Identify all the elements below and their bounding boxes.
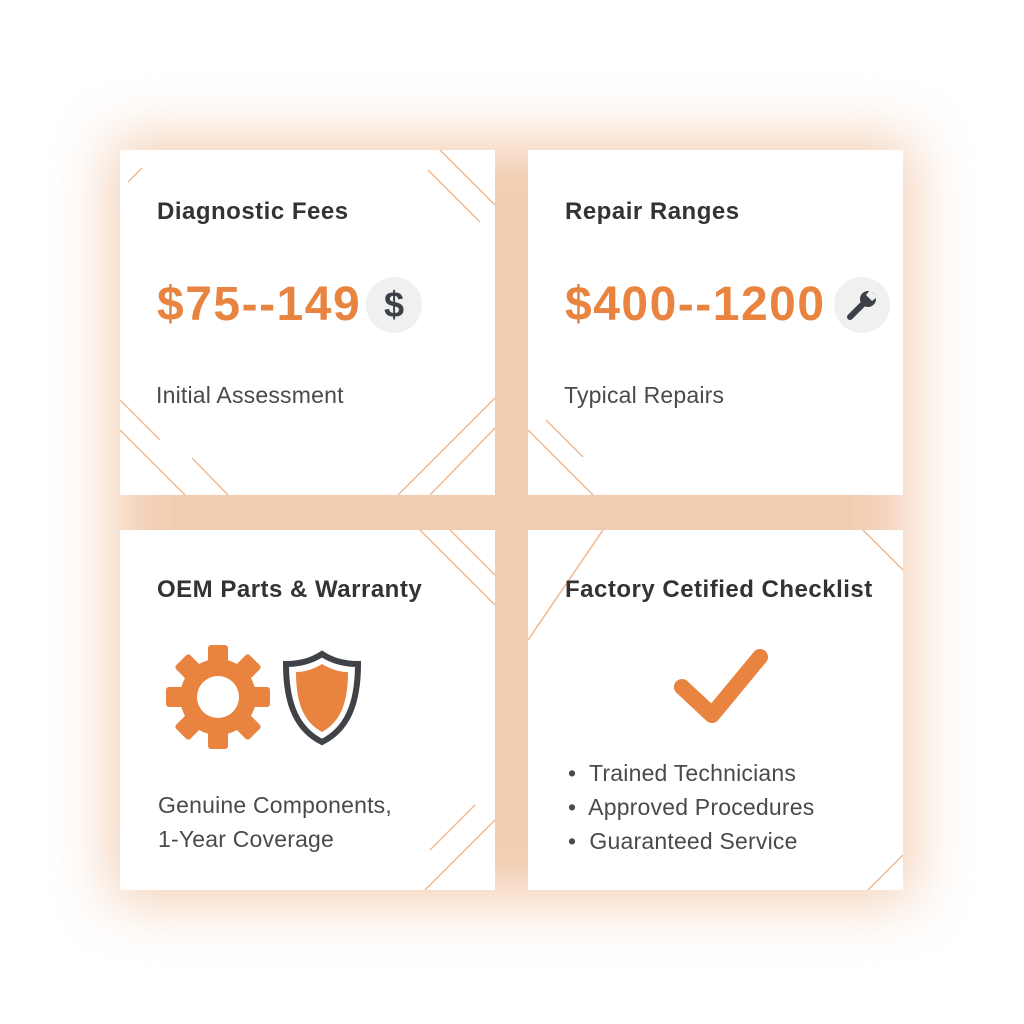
icon: gear xyxy=(166,645,270,749)
text: Initial Assessment xyxy=(156,382,344,408)
panel: repair ranges xyxy=(528,150,903,495)
price: $75--149 xyxy=(157,278,361,331)
icon: shield xyxy=(283,650,361,746)
text xyxy=(158,792,392,852)
heading: Factory Cetified Checklist xyxy=(565,576,873,603)
text: Genuine Components, xyxy=(158,792,392,818)
heading: Diagnostic Fees xyxy=(157,198,349,225)
icon: dollar xyxy=(366,277,422,333)
bullet list: • Trained Technicians xyxy=(568,760,796,786)
bullet list: • Approved Procedures xyxy=(568,794,814,820)
panel: diagnostic fees xyxy=(120,150,495,495)
icon: checkmark xyxy=(674,649,768,723)
panel: checklist xyxy=(528,530,903,890)
icon: dollar: $ xyxy=(384,284,404,325)
heading: OEM Parts & Warranty xyxy=(157,576,422,603)
price: $400--1200 xyxy=(565,278,826,331)
icon: wrench xyxy=(834,277,890,333)
text: Typical Repairs xyxy=(564,382,724,408)
panel: OEM parts xyxy=(120,530,495,890)
heading: Repair Ranges xyxy=(565,198,740,225)
text: 1-Year Coverage xyxy=(158,826,334,852)
bullet list: • Guaranteed Service xyxy=(568,828,798,854)
bullet list xyxy=(568,760,814,854)
